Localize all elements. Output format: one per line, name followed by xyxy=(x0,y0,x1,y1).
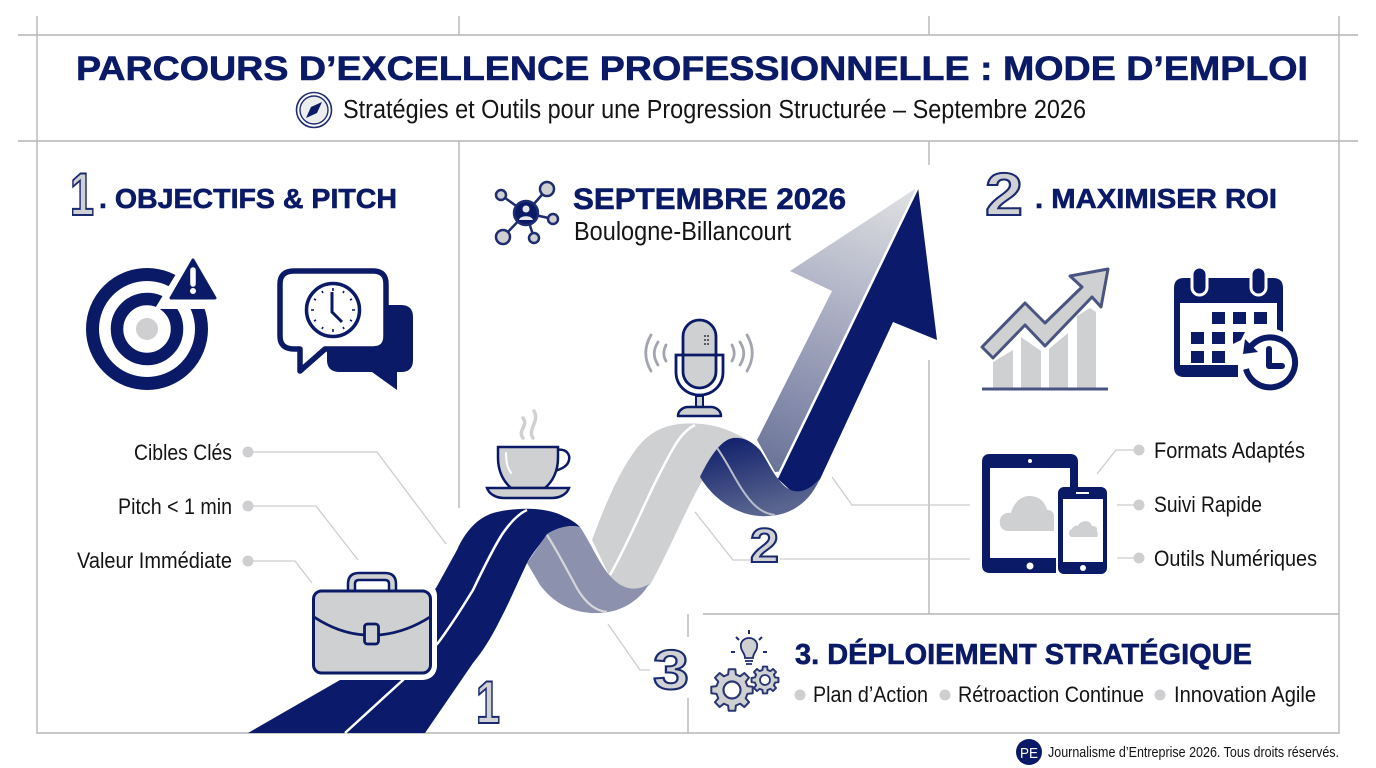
numeral 1: 1 xyxy=(70,161,94,228)
icon: PE logo xyxy=(1016,739,1042,765)
numeral: ribbon 2: 2 xyxy=(750,520,779,573)
gradient arrow upper half xyxy=(757,187,918,472)
bullet: innovation agile: Innovation Agile xyxy=(1174,682,1316,707)
cloud: tablet xyxy=(1000,496,1054,531)
title: PARCOURS D’EXCELLENCE PROFESSIONNELLE : MODE D’EMPLOI xyxy=(76,50,1308,88)
heading: déploiement: 3. DÉPLOIEMENT STRATÉGIQUE xyxy=(795,637,1252,671)
panel: date et lieu xyxy=(496,182,846,246)
panel: déploiement stratégique xyxy=(711,630,1316,711)
icon: calendar with clock xyxy=(1174,267,1295,387)
numeral: ribbon 1: 1 xyxy=(476,669,500,736)
footer xyxy=(1016,739,1339,765)
label: outils numériques: Outils Numériques xyxy=(1154,546,1317,571)
chart: rising ribbon arrow xyxy=(248,187,937,736)
label: suivi rapide: Suivi Rapide xyxy=(1154,492,1262,517)
numeral: ribbon 3: 3 xyxy=(653,638,689,701)
navy arrow half xyxy=(777,187,937,494)
mid-blue twist xyxy=(527,526,649,613)
icon: network xyxy=(496,182,558,244)
panel: maximiser roi xyxy=(982,161,1317,574)
text: lieu: Boulogne-Billancourt xyxy=(574,218,791,246)
icon: briefcase xyxy=(306,573,437,680)
heading: objectifs: . OBJECTIFS & PITCH xyxy=(99,183,397,214)
cloud: phone xyxy=(1069,521,1098,537)
icon: microphone xyxy=(646,320,752,416)
icon: target with warning xyxy=(92,252,226,384)
numeral 2: 2 xyxy=(985,161,1023,228)
label: valeur immédiate: Valeur Immédiate xyxy=(77,548,232,573)
icon: PE logo: PE xyxy=(1020,745,1038,762)
icon: coffee cup xyxy=(487,411,569,498)
bullet: rétroaction continue: Rétroaction Continue xyxy=(958,682,1144,707)
label: formats adaptés: Formats Adaptés xyxy=(1154,438,1305,463)
navy ribbon start xyxy=(248,509,580,733)
bullet: plan d'action: Plan d’Action xyxy=(813,682,928,707)
heading: septembre 2026: SEPTEMBRE 2026 xyxy=(573,183,846,216)
icon: gears and bulb xyxy=(711,630,778,711)
label: pitch: Pitch < 1 min xyxy=(118,494,232,519)
label: cibles clés: Cibles Clés xyxy=(134,440,232,465)
icon: chat with clock xyxy=(280,271,413,390)
subtitle: Stratégies et Outils pour une Progression Structurée – Septembre 2026 xyxy=(343,96,1086,124)
heading: maximiser: . MAXIMISER ROI xyxy=(1035,183,1277,214)
icon: tablet and phone xyxy=(982,454,1107,574)
leader lines xyxy=(248,450,1139,670)
navy twist xyxy=(700,438,820,516)
icon: growth chart xyxy=(982,269,1108,389)
panel: objectifs et pitch xyxy=(70,161,413,573)
icon: compass xyxy=(296,92,332,128)
light gray ribbon xyxy=(592,423,750,589)
